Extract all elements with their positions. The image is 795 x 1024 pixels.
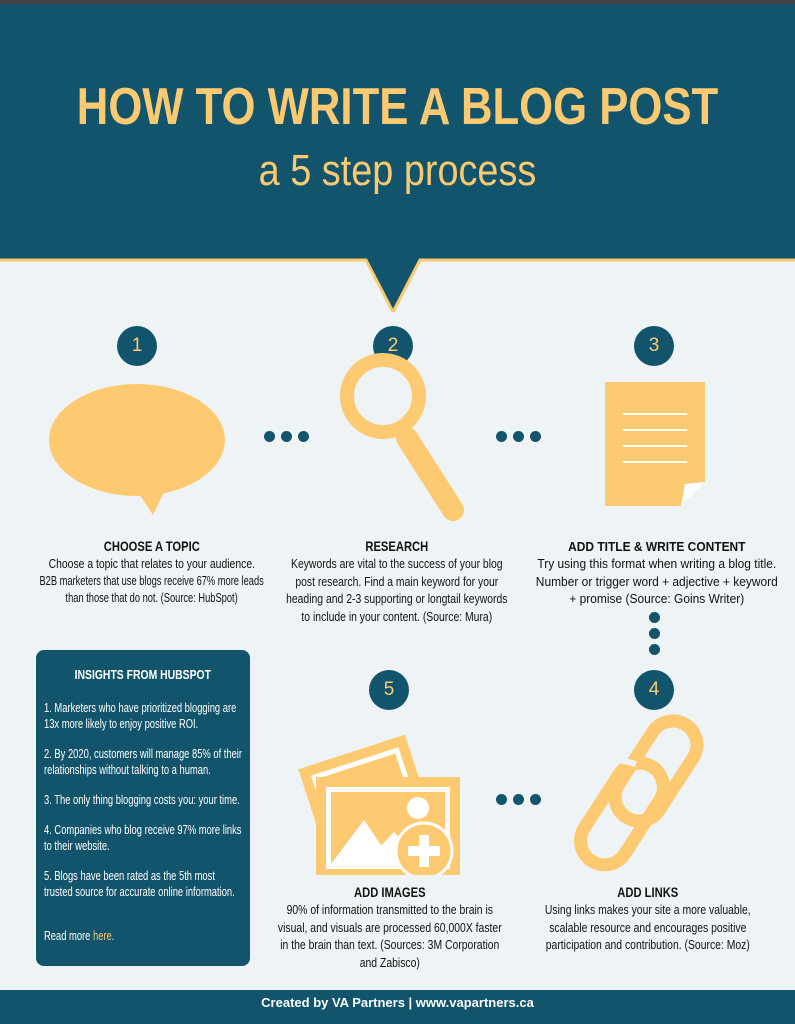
- step 4 number: [634, 670, 674, 710]
- step 5 number: 5: [384, 679, 394, 700]
- step 3 text: + promise (Source: Goins Writer): [569, 591, 744, 606]
- step 3 text: [536, 539, 778, 606]
- insights list: [44, 701, 242, 943]
- step 2 text: Keywords are vital to the success of your blog: [291, 556, 503, 571]
- insights list: Read more here.: [44, 929, 114, 943]
- step 4 text: Using links makes your site a more valuable,: [545, 902, 751, 917]
- step 5 text: 90% of information transmitted to the brain is: [287, 902, 493, 917]
- step 2 text: RESEARCH: [365, 538, 428, 554]
- step 3 text: Try using this format when writing a blog title.: [537, 556, 776, 571]
- insights list: 1. Marketers who have prioritized blogging are: [44, 701, 236, 715]
- insights list: 13x more likely to enjoy positive ROI.: [44, 717, 198, 731]
- insights list: 3. The only thing blogging costs you: your time.: [44, 793, 240, 807]
- step 1 text: [40, 538, 264, 605]
- insights list: 2. By 2020, customers will manage 85% of their: [44, 747, 242, 761]
- icon: images: [298, 734, 460, 875]
- step 5 text: in the brain than text. (Sources: 3M Corporation: [280, 937, 499, 952]
- step 2 text: heading and 2-3 supporting or longtail keywords: [286, 591, 508, 606]
- step 2 text: to include in your content. (Source: Mura): [301, 608, 492, 624]
- step 2 text: post research. Find a main keyword for your: [295, 574, 498, 588]
- subtitle: a 5 step process: [259, 146, 536, 195]
- dots 1-2: [264, 431, 309, 442]
- step 3 number: [634, 326, 674, 366]
- step 1 number: [117, 326, 157, 366]
- step 5 text: visual, and visuals are processed 60,000X faster: [278, 920, 502, 934]
- step 1 text: than those that do not. (Source: HubSpot): [66, 591, 238, 605]
- step 1 text: B2B marketers that use blogs receive 67% more leads: [40, 574, 264, 588]
- step 3 number: 3: [649, 335, 659, 356]
- insights list: trusted source for accurate online information.: [44, 885, 235, 899]
- step 5 number: [369, 670, 409, 710]
- step 2 text: [286, 538, 508, 624]
- footer: Created by VA Partners | www.vapartners.ca: [261, 995, 534, 1010]
- step 1 number: 1: [132, 335, 142, 356]
- step 4 text: scalable resource and encourages positive: [549, 920, 746, 934]
- header banner: [0, 0, 795, 312]
- insights list: to their website.: [44, 839, 110, 853]
- step 4 text: [545, 884, 751, 952]
- step 3 text: Number or trigger word + adjective + keyword: [536, 574, 778, 588]
- step 2 number: 2: [388, 335, 398, 356]
- step 5 text: [278, 884, 502, 970]
- insights heading: INSIGHTS FROM HUBSPOT: [75, 667, 211, 682]
- insights list: 4. Companies who blog receive 97% more links: [44, 823, 241, 837]
- title: HOW TO WRITE A BLOG POST: [77, 78, 718, 136]
- dots 5-4: [496, 794, 541, 805]
- panel: insights from hubspot: [36, 650, 250, 966]
- icon: chain link: [574, 714, 704, 872]
- step 5 text: ADD IMAGES: [354, 884, 426, 900]
- icon: document: [605, 382, 705, 506]
- step 3 text: ADD TITLE & WRITE CONTENT: [568, 539, 745, 554]
- step 4 text: participation and contribution. (Source: Moz): [546, 937, 750, 952]
- dots 3-4: [649, 612, 660, 655]
- dots 2-3: [496, 431, 541, 442]
- insights list: relationships without talking to a human.: [44, 763, 211, 777]
- step 1 text: Choose a topic that relates to your audience.: [49, 556, 255, 571]
- step 4 number: 4: [649, 679, 659, 700]
- step 4 text: ADD LINKS: [617, 884, 678, 900]
- icon: magnifier: [340, 353, 464, 521]
- step 2 number: [373, 326, 413, 366]
- step 1 text: CHOOSE A TOPIC: [104, 538, 200, 554]
- footer: [0, 990, 795, 1024]
- insights list: 5. Blogs have been rated as the 5th most: [44, 869, 215, 883]
- step 5 text: and Zabisco): [360, 954, 420, 970]
- icon: speech bubble: [49, 384, 225, 515]
